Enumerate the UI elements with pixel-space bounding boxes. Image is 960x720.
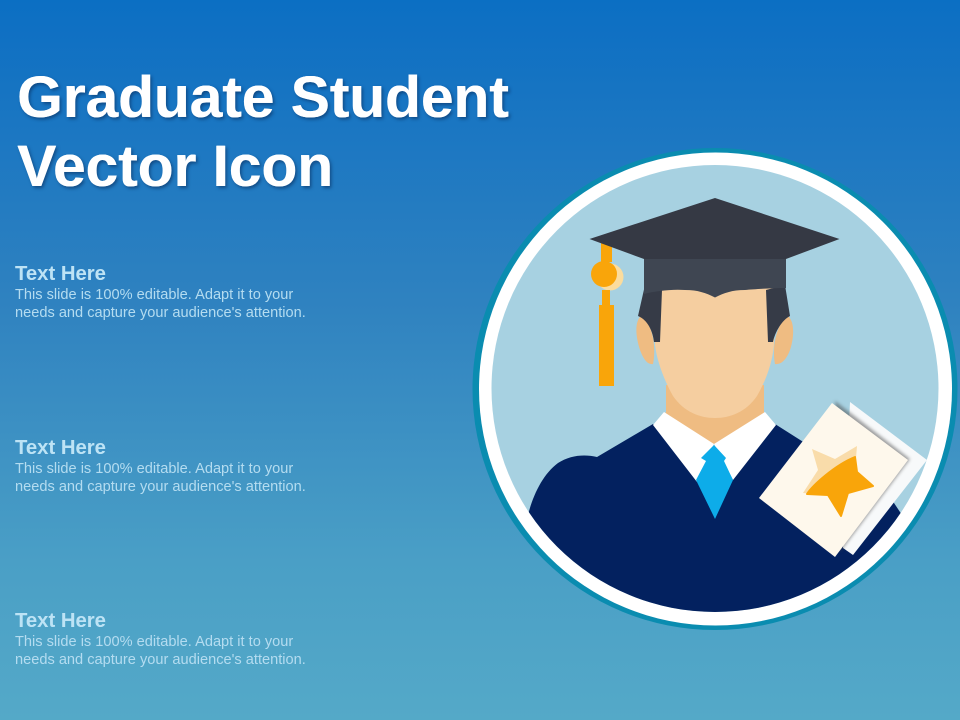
circle badge (472, 148, 958, 630)
text block 1: This slide is 100% editable. Adapt it to your (15, 287, 293, 303)
face (655, 288, 775, 418)
collar (653, 412, 776, 482)
title: Vector Icon (17, 134, 333, 199)
certificates (759, 401, 927, 557)
ears (636, 316, 793, 364)
text block 2: Text Here (15, 437, 106, 459)
text block 3: Text Here (15, 610, 106, 632)
text block 3 (15, 610, 306, 668)
text block 2 (15, 437, 306, 495)
gown (528, 424, 900, 612)
text block 3: This slide is 100% editable. Adapt it to your (15, 634, 293, 650)
star (803, 446, 873, 516)
cap band (644, 258, 786, 298)
text block 1: Text Here (15, 263, 106, 285)
hair (638, 285, 790, 342)
neck (654, 385, 775, 444)
title: Graduate Student (17, 65, 509, 130)
text block 3: needs and capture your audience's attention. (15, 652, 306, 668)
graduate illustration (472, 148, 958, 630)
mortarboard (590, 198, 840, 259)
title (17, 65, 512, 199)
text block 2: This slide is 100% editable. Adapt it to your (15, 461, 293, 477)
text block 1: needs and capture your audience's attention. (15, 305, 306, 321)
tie (696, 445, 733, 519)
tassel (591, 243, 624, 386)
text block 2: needs and capture your audience's attention. (15, 479, 306, 495)
text block 1 (15, 263, 306, 321)
